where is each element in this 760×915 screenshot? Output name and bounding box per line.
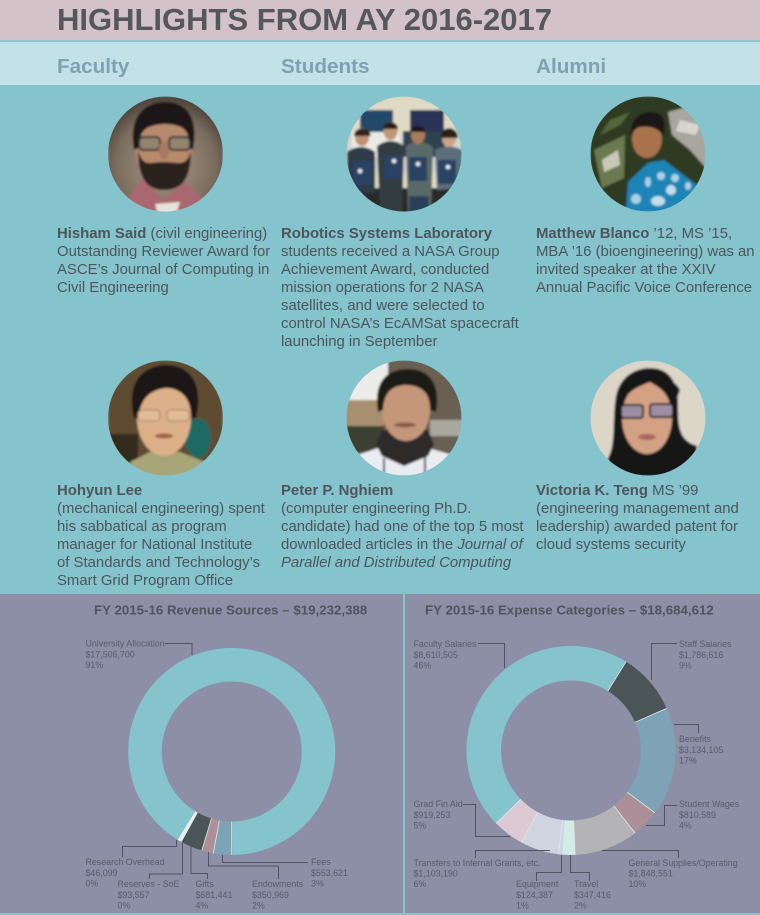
- label: Grad Fin Aid: $919,253: [414, 810, 450, 820]
- label: Equipment: [516, 855, 562, 910]
- text: Hohyun Lee: his sabbatical as program: [57, 519, 227, 535]
- label: Travel: Travel: [574, 879, 598, 889]
- text: Peter P. Nghiem: (computer engineering Ph.D.: [281, 501, 471, 517]
- label: Grad Fin Aid: Grad Fin Aid: [414, 799, 463, 809]
- label: Research Overhead: 0%: [86, 878, 98, 888]
- label: Staff Salaries: 9%: [679, 660, 692, 670]
- label: Travel: 2%: [574, 900, 587, 910]
- label: Fees: 3%: [311, 878, 324, 888]
- label: Student Wages: 4%: [679, 820, 692, 830]
- label: Travel: $347,416: [574, 890, 611, 900]
- label: Reserves - SoE: 0%: [118, 900, 130, 910]
- text: Matthew Blanco: Matthew Blanco ’12, MS ’15,: [536, 226, 732, 242]
- label: Transfers to Internal Grants, etc.: [414, 850, 550, 889]
- label: Transfers to Internal Grants, etc.: Transfers to Internal Grants, etc.: [414, 858, 540, 868]
- text: Peter P. Nghiem: Peter P. Nghiem: [281, 483, 393, 499]
- text: Hohyun Lee: Hohyun Lee: [57, 483, 142, 499]
- text: Hisham Said: Hisham Said (civil engineering): [57, 226, 267, 242]
- label: Benefits: $3,134,105: [679, 745, 723, 755]
- text: Peter P. Nghiem: candidate) had one of the top 5 most: [281, 519, 524, 535]
- label: Equipment: $124,387: [516, 890, 553, 900]
- label: Student Wages: $810,589: [679, 810, 716, 820]
- label: Gifts: $681,441: [196, 890, 232, 900]
- label: Gifts: 4%: [196, 900, 208, 910]
- label: Transfers to Internal Grants, etc.: $1,103,190: [414, 868, 458, 878]
- text: Victoria K. Teng: cloud systems security: [536, 537, 686, 553]
- label: Faculty Salaries: [414, 639, 504, 670]
- text: Peter P. Nghiem: Parallel and Distributed Computing: [281, 555, 511, 571]
- photo: Robotics Systems Laboratory: [346, 96, 462, 212]
- text: Hisham Said: ASCE’s Journal of Computing in: [57, 262, 269, 278]
- label: Grad Fin Aid: 5%: [414, 820, 426, 830]
- text: Victoria K. Teng: leadership) awarded patent for: [536, 519, 738, 535]
- label: Endowments: Endowments: [252, 879, 304, 889]
- label: Staff Salaries: $1,786,616: [679, 650, 723, 660]
- label: Gifts: [191, 845, 232, 910]
- label: Endowments: 2%: [252, 900, 265, 910]
- chart title: revenue: FY 2015-16 Revenue Sources – $19,232,388: [94, 602, 367, 618]
- label: Research Overhead: [86, 840, 176, 888]
- text: Hohyun Lee: of Standards and Technology’s: [57, 555, 260, 571]
- label: University Allocation: 91%: [86, 660, 103, 670]
- text: Hisham Said: Outstanding Reviewer Award for: [57, 244, 270, 260]
- label: Fees: $553,621: [311, 868, 348, 878]
- label: General Supplies/Operating: [602, 850, 738, 889]
- text: Robotics Systems Laboratory: mission operations for 2 NASA: [281, 280, 484, 296]
- label: Reserves - SoE: Reserves - SoE: [118, 879, 180, 889]
- text: Robotics Systems Laboratory: control NASA’s EcAMSat spacecraft: [281, 316, 519, 332]
- text: Hohyun Lee: [57, 483, 265, 589]
- photo: Peter P. Nghiem: [346, 360, 462, 476]
- label: Student Wages: [646, 799, 740, 830]
- text: Hisham Said: [57, 226, 270, 296]
- label: Faculty Salaries: Faculty Salaries: [414, 639, 477, 649]
- label: Fees: Fees: [311, 857, 331, 867]
- label: Benefits: [674, 724, 723, 766]
- photo: Hisham Said: [108, 96, 223, 212]
- text: Hisham Said: Civil Engineering: [57, 280, 169, 296]
- text: Victoria K. Teng: [536, 483, 739, 553]
- label: Travel: [570, 855, 611, 910]
- label: Staff Salaries: [652, 639, 732, 680]
- text: Robotics Systems Laboratory: Achievement Award, conducted: [281, 262, 489, 278]
- title banner: [0, 0, 760, 40]
- text: Robotics Systems Laboratory: launching in September: [281, 334, 437, 350]
- label: University Allocation: [86, 638, 192, 670]
- label: Reserves - SoE: $93,557: [118, 890, 150, 900]
- label: Faculty Salaries: $8,610,505: [414, 650, 458, 660]
- label: Benefits: Benefits: [679, 734, 712, 744]
- donut chart: expense: [448, 627, 694, 874]
- column heading band: [0, 40, 760, 85]
- label: Endowments: [208, 852, 304, 910]
- title: HIGHLIGHTS FROM AY 2016-2017: [57, 2, 552, 37]
- label: Staff Salaries: Staff Salaries: [679, 639, 732, 649]
- label: Gifts: Gifts: [196, 879, 214, 889]
- chart title: expense: FY 2015-16 Expense Categories – $18,684,612: [425, 602, 714, 618]
- label: Fees: [222, 855, 348, 888]
- label: Reserves - SoE: [118, 843, 182, 910]
- label: Research Overhead: $46,099: [86, 868, 118, 878]
- photo: Matthew Blanco: [590, 96, 706, 212]
- text: Peter P. Nghiem: [281, 483, 524, 571]
- label: University Allocation: University Allocation: [86, 638, 165, 648]
- text: Hohyun Lee: manager for National Institute: [57, 537, 252, 553]
- label: Endowments: $350,969: [252, 890, 289, 900]
- text: Hohyun Lee: Smart Grid Program Office: [57, 573, 233, 589]
- photo: Hohyun Lee: [108, 360, 223, 476]
- photo: Victoria K. Teng: [590, 360, 706, 476]
- label: Grad Fin Aid: [414, 799, 510, 836]
- label: Equipment: Equipment: [516, 879, 559, 889]
- heading: Students: Students: [281, 55, 370, 78]
- text: Matthew Blanco: invited speaker at the XXIV: [536, 262, 716, 278]
- label: Benefits: 17%: [679, 756, 697, 766]
- text: Robotics Systems Laboratory: Robotics Systems Laboratory: [281, 226, 492, 242]
- text: Robotics Systems Laboratory: [281, 226, 519, 350]
- label: General Supplies/Operating: 10%: [628, 879, 646, 889]
- text: Matthew Blanco: Annual Pacific Voice Conference: [536, 280, 752, 296]
- panel: expense categories: [405, 594, 760, 913]
- panel: revenue sources: [0, 594, 403, 913]
- text: Robotics Systems Laboratory: satellites, and were selected to: [281, 298, 485, 314]
- heading: Alumni: Alumni: [536, 55, 606, 78]
- label: Equipment: 1%: [516, 900, 529, 910]
- text: Peter P. Nghiem: downloaded articles in the Journal of: [281, 537, 523, 553]
- label: Transfers to Internal Grants, etc.: 6%: [414, 879, 426, 889]
- heading: Faculty: Faculty: [57, 55, 129, 78]
- text: Victoria K. Teng: Victoria K. Teng MS ’99: [536, 483, 698, 499]
- text: Victoria K. Teng: (engineering management and: [536, 501, 739, 517]
- text: Matthew Blanco: MBA ’16 (bioengineering) was an: [536, 244, 755, 260]
- label: University Allocation: $17,506,700: [86, 650, 135, 660]
- label: Faculty Salaries: 46%: [414, 660, 431, 670]
- label: General Supplies/Operating: General Supplies/Operating: [628, 858, 738, 868]
- text: Robotics Systems Laboratory: students received a NASA Group: [281, 244, 500, 260]
- label: General Supplies/Operating: $1,848,551: [628, 868, 673, 878]
- donut chart: revenue: [112, 632, 351, 871]
- text: Hohyun Lee: (mechanical engineering) spent: [57, 501, 265, 517]
- label: Research Overhead: Research Overhead: [86, 857, 165, 867]
- text: Matthew Blanco: [536, 226, 755, 296]
- label: Student Wages: Student Wages: [679, 799, 740, 809]
